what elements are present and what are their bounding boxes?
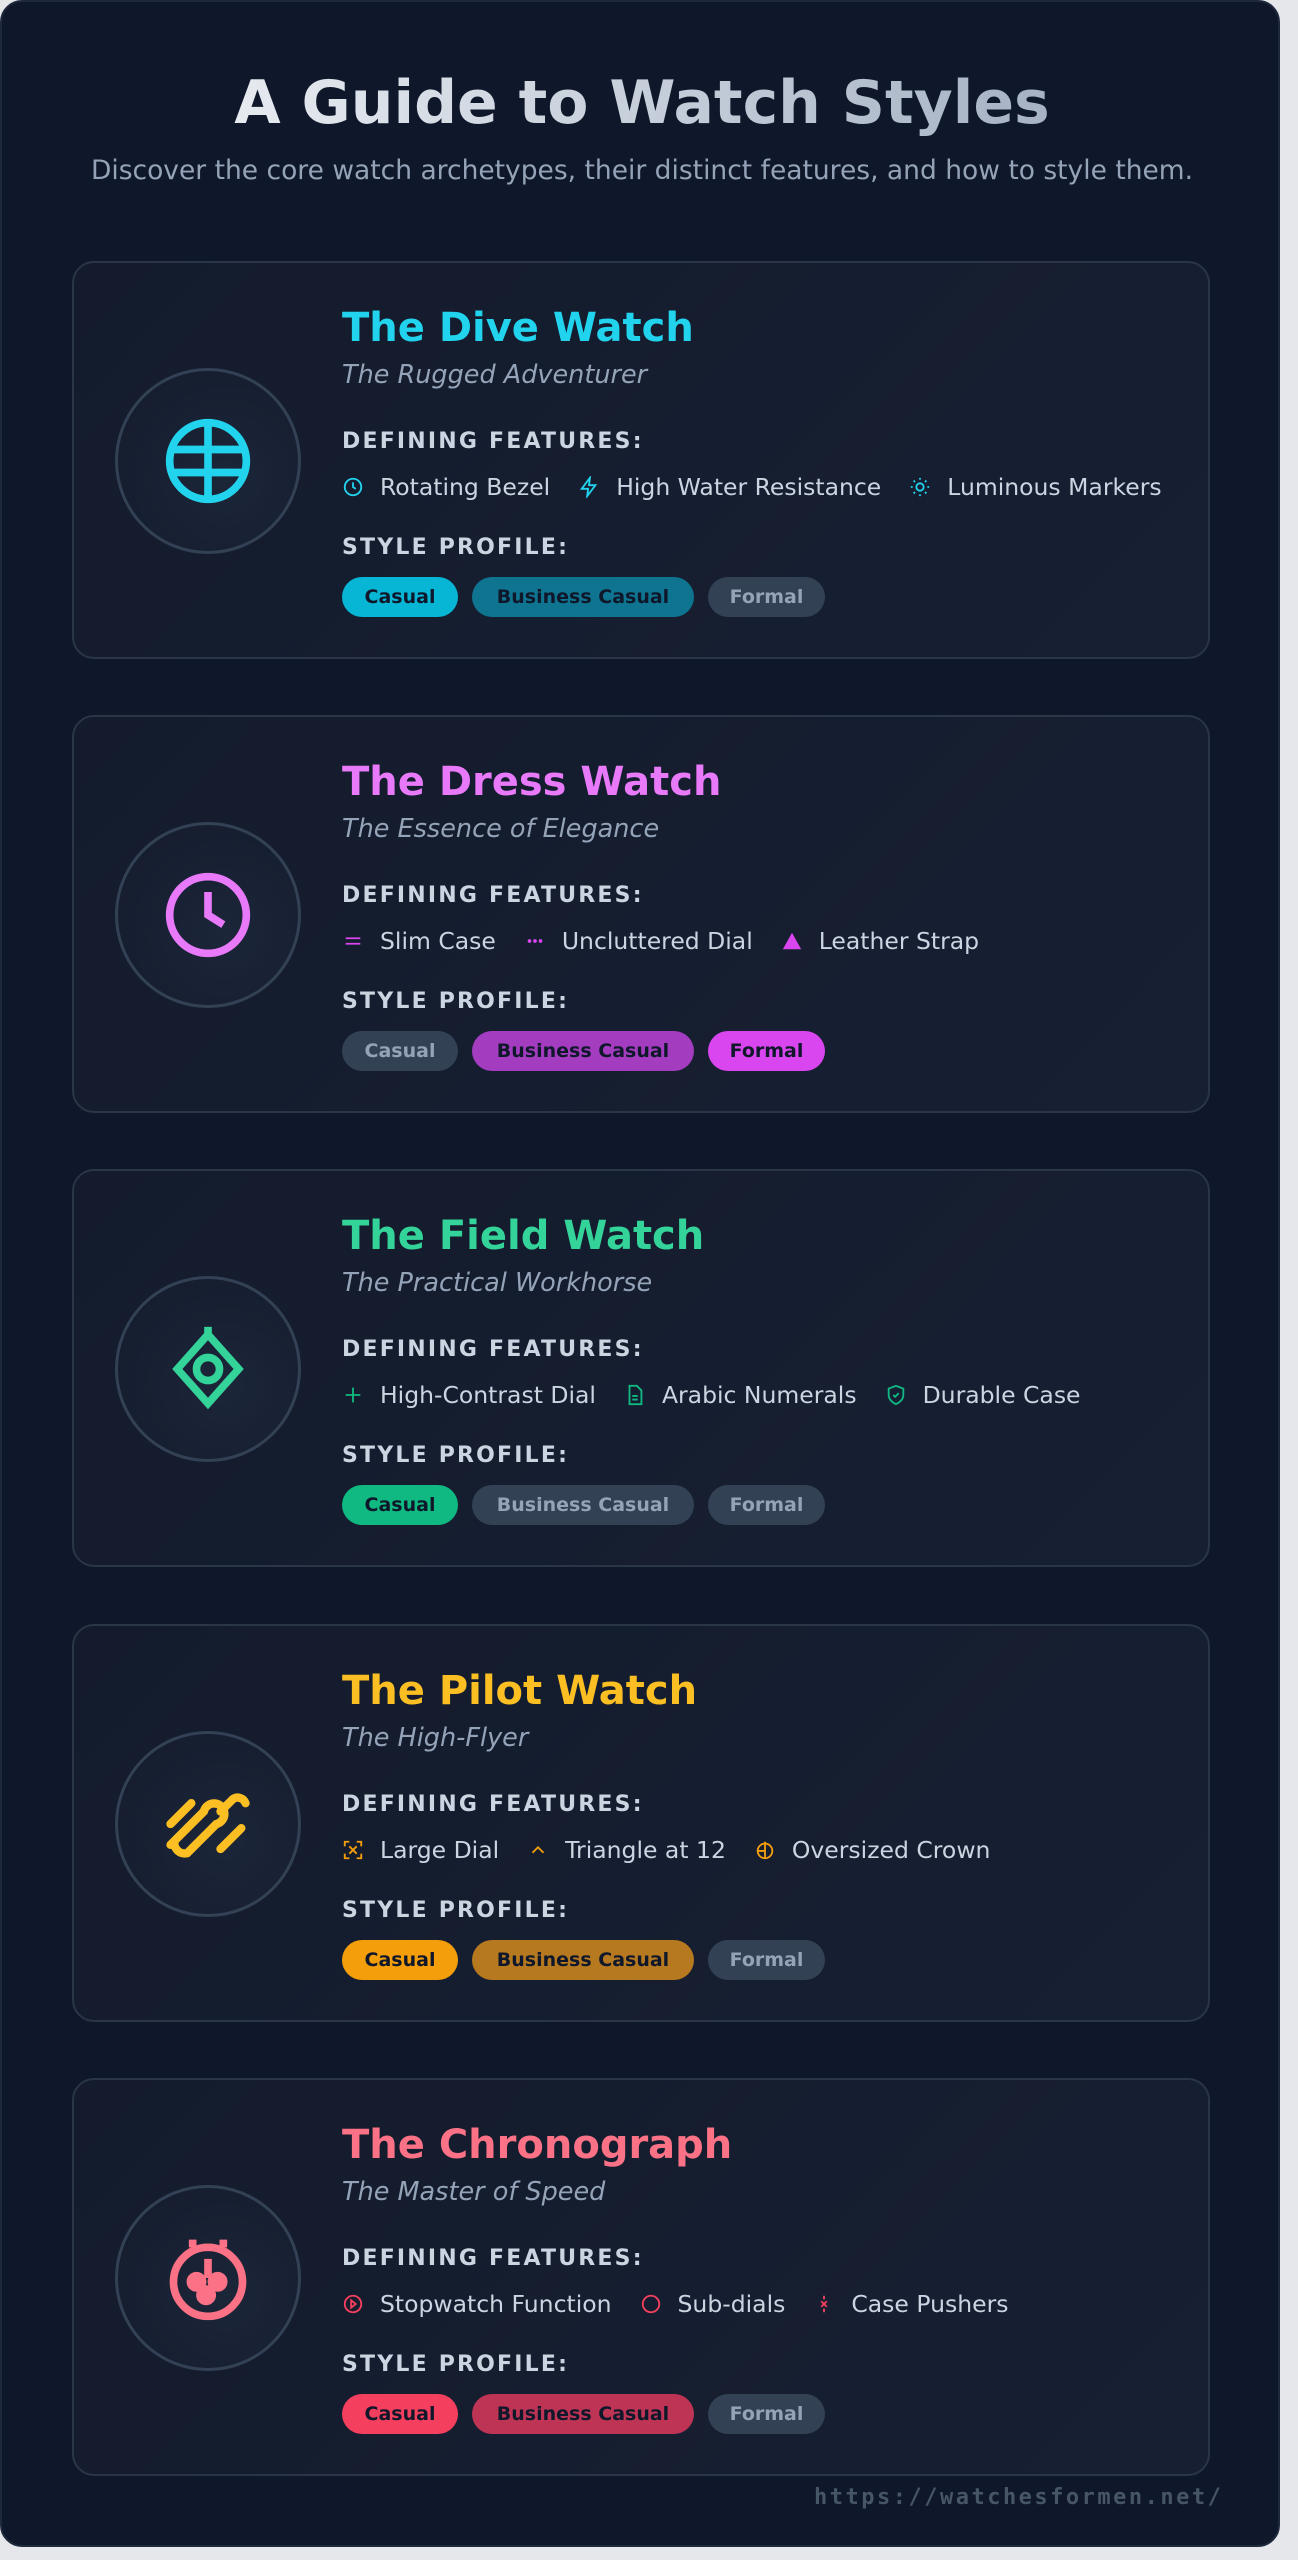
label style: STYLE PROFILE: — [342, 2352, 569, 2377]
features list: Oversized Crown — [792, 1836, 990, 1864]
title — [2, 68, 1282, 138]
features list: Luminous Markers — [947, 473, 1162, 501]
features list: Leather Strap — [819, 927, 979, 955]
icon: pilot — [115, 1731, 301, 1917]
heading: The Chronograph — [342, 2122, 732, 2168]
features list: Triangle at 12 — [565, 1836, 726, 1864]
panel: dress watch — [72, 715, 1210, 1113]
icon: dive globe — [115, 368, 301, 554]
features list: Large Dial — [380, 1836, 499, 1864]
features list — [346, 1381, 1081, 1409]
footer url: https://watchesformen.net/ — [814, 2485, 1223, 2510]
tagline: The Master of Speed — [342, 2177, 605, 2207]
features list — [344, 1836, 990, 1864]
pills: Casual — [365, 586, 435, 608]
features list: Slim Case — [380, 927, 496, 955]
features list: Uncluttered Dial — [562, 927, 753, 955]
pills — [342, 2394, 825, 2434]
label style: STYLE PROFILE: — [342, 1898, 569, 1923]
features list: Rotating Bezel — [380, 473, 550, 501]
pills: Formal — [730, 1949, 803, 1971]
label features: DEFINING FEATURES: — [342, 429, 644, 454]
pills — [342, 1485, 825, 1525]
pills: Business Casual — [497, 1494, 669, 1516]
tagline: The Essence of Elegance — [342, 814, 659, 844]
heading: The Field Watch — [342, 1213, 704, 1259]
features list: Stopwatch Function — [380, 2290, 612, 2318]
pills: Formal — [730, 1040, 803, 1062]
features list: Sub-dials — [678, 2290, 785, 2318]
icon: clock — [115, 822, 301, 1008]
icon: stopwatch — [115, 2185, 301, 2371]
features list — [344, 2290, 1008, 2318]
pills: Casual — [365, 1040, 435, 1062]
panel: chronograph — [72, 2078, 1210, 2476]
subtitle: Discover the core watch archetypes, their distinct features, and how to style them. — [91, 155, 1193, 186]
features list: High Water Resistance — [616, 473, 881, 501]
tagline: The Practical Workhorse — [342, 1268, 652, 1298]
features list: Case Pushers — [851, 2290, 1008, 2318]
pills — [342, 1940, 825, 1980]
label features: DEFINING FEATURES: — [342, 1792, 644, 1817]
pills: Casual — [365, 2403, 435, 2425]
features list — [344, 473, 1162, 501]
label style: STYLE PROFILE: — [342, 989, 569, 1014]
title: A Guide to Watch Styles — [234, 68, 1050, 138]
features list: Durable Case — [923, 1381, 1081, 1409]
pills: Business Casual — [497, 1949, 669, 1971]
pills: Casual — [365, 1949, 435, 1971]
pills: Business Casual — [497, 2403, 669, 2425]
heading: The Pilot Watch — [342, 1668, 697, 1714]
label style: STYLE PROFILE: — [342, 535, 569, 560]
pills: Formal — [730, 586, 803, 608]
pills — [342, 577, 825, 617]
label style: STYLE PROFILE: — [342, 1443, 569, 1468]
panel: field watch — [72, 1169, 1210, 1567]
label features: DEFINING FEATURES: — [342, 883, 644, 908]
panel: dive watch — [72, 261, 1210, 659]
features list: Arabic Numerals — [662, 1381, 857, 1409]
icon: compass diamond — [115, 1276, 301, 1462]
pills: Business Casual — [497, 586, 669, 608]
panel: pilot watch — [72, 1624, 1210, 2022]
pills: Formal — [730, 2403, 803, 2425]
pills: Business Casual — [497, 1040, 669, 1062]
tagline: The High-Flyer — [342, 1723, 528, 1753]
tagline: The Rugged Adventurer — [342, 360, 647, 390]
features list — [346, 927, 979, 955]
heading: The Dive Watch — [342, 305, 694, 351]
pills: Formal — [730, 1494, 803, 1516]
heading: The Dress Watch — [342, 759, 721, 805]
label features: DEFINING FEATURES: — [342, 2246, 644, 2271]
features list: High-Contrast Dial — [380, 1381, 596, 1409]
label features: DEFINING FEATURES: — [342, 1337, 644, 1362]
pills: Casual — [365, 1494, 435, 1516]
pills — [342, 1031, 825, 1071]
